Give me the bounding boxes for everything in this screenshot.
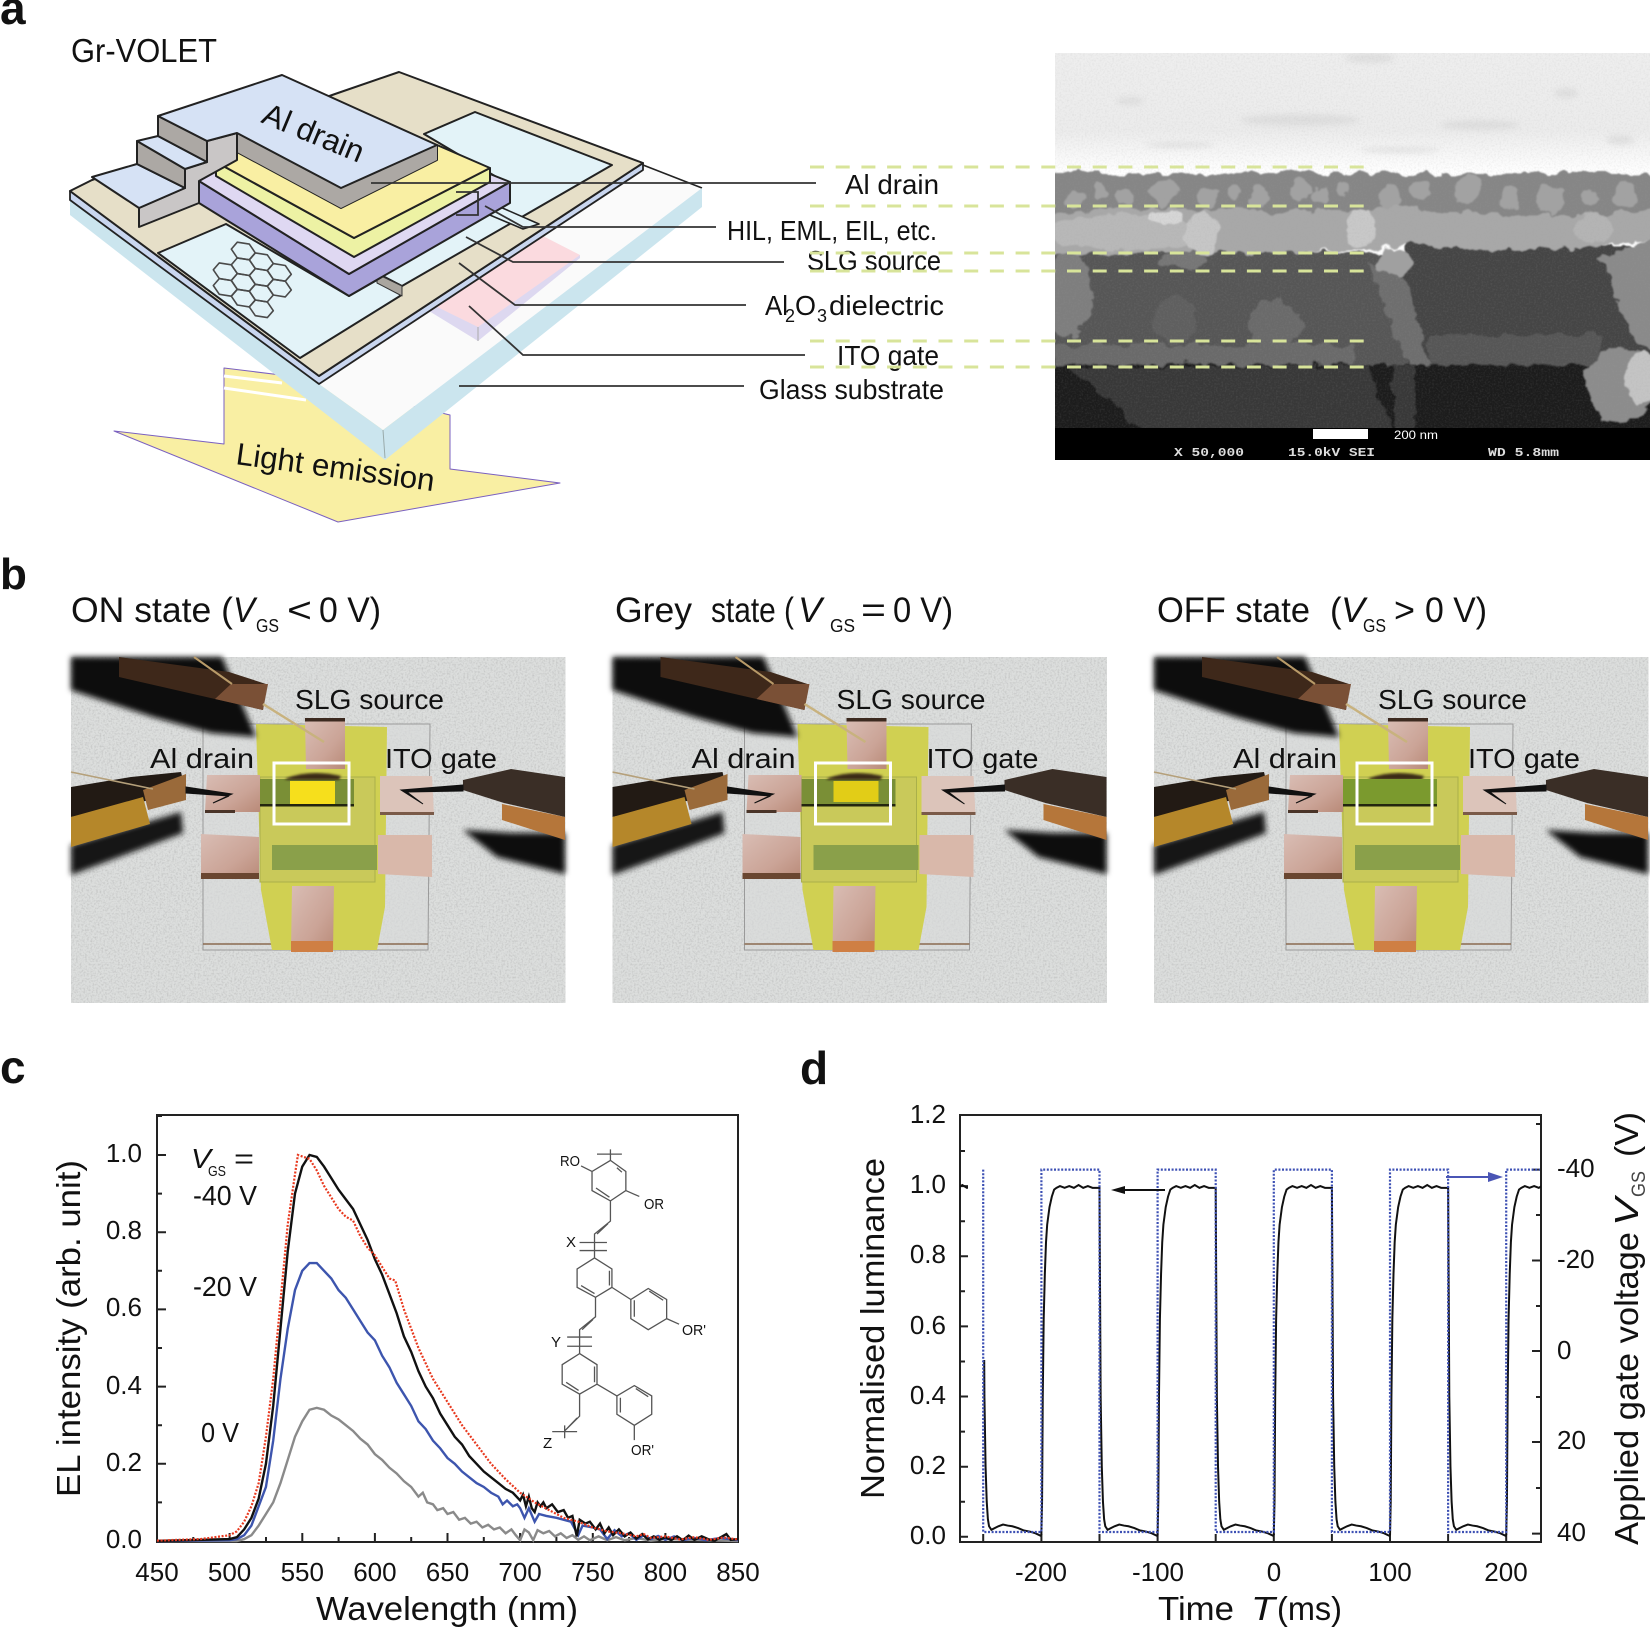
photo: Grey state device: [612, 657, 1107, 1003]
arrow: light emission: Light emission: [234, 436, 437, 498]
heading: ON state: GS: [256, 616, 279, 636]
SEM info bar: [1055, 428, 1650, 460]
x tick labels: 650: [426, 1557, 469, 1587]
photo: OFF state device: ITO gate: [1468, 743, 1580, 774]
voltage labels: [191, 1143, 257, 1448]
left tick labels: 0.8: [910, 1239, 946, 1269]
heading: ON state: V: [233, 591, 258, 630]
heading: OFF state: GS: [1363, 616, 1386, 636]
dashed layer guides: [810, 167, 1364, 367]
SLG source regions: [158, 112, 612, 358]
x tick labels: 0: [1267, 1557, 1281, 1587]
label on drain: Al drain: [257, 96, 370, 169]
masking area left of first fall: [968, 1360, 983, 1530]
OLED stack: [92, 75, 510, 296]
right tick labels: 0: [1557, 1335, 1571, 1365]
chart: EL spectra: [50, 1115, 760, 1627]
x tick labels: -200: [1015, 1557, 1067, 1587]
right tick labels: 20: [1557, 1425, 1586, 1455]
voltage labels: V: [191, 1143, 213, 1174]
layer labels: [727, 169, 944, 405]
heading: ON state: 0 V): [319, 591, 381, 630]
layer labels: O: [795, 290, 816, 321]
x tick labels: 700: [498, 1557, 542, 1587]
x tick labels: -100: [1132, 1557, 1184, 1587]
right axis title: V: [1608, 1194, 1645, 1226]
left axis title: Normalised luminance: [854, 1158, 891, 1499]
photo: ON state device: Al drain: [150, 743, 254, 774]
chart: luminance and gate voltage vs time: [854, 1099, 1650, 1627]
SEM micrograph: [1040, 53, 1650, 460]
heading: Grey state: state (: [711, 591, 794, 630]
heading: ON state: ON state (: [71, 591, 233, 630]
SEM info bar: X 50,000: [1174, 446, 1244, 460]
right tick labels: -40: [1557, 1153, 1595, 1183]
left tick labels: 0.2: [910, 1450, 946, 1480]
right tick labels: -20: [1557, 1244, 1595, 1274]
panel letter d: d: [800, 1042, 828, 1094]
heading: Grey state: GS: [830, 616, 855, 636]
arrow: luminance axis: [1111, 1186, 1165, 1194]
y tick labels: 0.0: [106, 1524, 142, 1554]
layer labels: ITO gate: [837, 340, 939, 371]
chemical structure: Y: [551, 1334, 561, 1351]
heading: OFF state: [1157, 591, 1487, 636]
chemical structure: OR: [644, 1196, 664, 1213]
chemical structure: OR': [682, 1322, 706, 1339]
y tick labels: 0.8: [106, 1215, 142, 1245]
heading: OFF state: OFF state: [1157, 591, 1310, 630]
heading: OFF state: >: [1394, 591, 1415, 630]
layer labels: 2: [785, 306, 795, 326]
x tick labels: [135, 1557, 760, 1587]
y tick labels: 1.0: [106, 1138, 142, 1168]
x tick labels: [1015, 1557, 1528, 1587]
y tick labels: 0.6: [106, 1292, 142, 1322]
spectra curves: [157, 1155, 738, 1541]
layer labels: Glass substrate: [759, 374, 944, 405]
layer labels: Al: [765, 290, 788, 321]
y axis title: EL intensity (arb. unit): [50, 1160, 87, 1497]
x tick labels: 100: [1368, 1557, 1412, 1587]
x tick labels: 450: [135, 1557, 179, 1587]
x axis title: Time: [1158, 1590, 1234, 1627]
left tick labels: 0.0: [910, 1520, 946, 1550]
heading: Grey state: =: [861, 591, 886, 630]
arrow: light emission: [114, 368, 560, 522]
left tick labels: 1.0: [910, 1169, 946, 1199]
x tick labels: 800: [644, 1557, 687, 1587]
x tick labels: 600: [353, 1557, 397, 1587]
y tick labels: [106, 1138, 142, 1554]
chemical structure: RO: [560, 1153, 580, 1170]
gate voltage trace: [983, 1170, 1540, 1532]
layer labels: HIL, EML, EIL, etc.: [727, 215, 937, 246]
heading: Grey state: [615, 591, 953, 636]
heading: ON state: [71, 591, 381, 636]
left tick labels: [910, 1099, 946, 1550]
right axis title: Applied gate voltage: [1608, 1232, 1645, 1545]
masking area before first pulse: [968, 1117, 986, 1360]
photo: OFF state device: Al drain: [1233, 743, 1337, 774]
voltage labels: -40 V: [193, 1180, 257, 1211]
photo: Grey state device: Al drain: [692, 743, 796, 774]
dielectric layer: [70, 163, 643, 384]
voltage labels: 0 V: [201, 1417, 239, 1448]
x axis title: T: [1251, 1590, 1278, 1627]
chemical structure: OR': [631, 1442, 654, 1459]
icon: graphene honeycomb: [213, 242, 291, 318]
chemical structure: X: [566, 1234, 576, 1251]
arrow: voltage axis: [1446, 1172, 1503, 1182]
leader lines: [371, 183, 816, 386]
right axis title: GS: [1629, 1171, 1650, 1197]
photo: ON state device: SLG source: [295, 684, 444, 715]
right tick labels: [1557, 1153, 1595, 1547]
heading: OFF state: 0 V): [1425, 591, 1487, 630]
photo: Grey state device: SLG source: [836, 684, 986, 715]
chemical structure: Z: [543, 1435, 552, 1452]
chemical structure: [543, 1149, 706, 1459]
photo: ON state device: ITO gate: [385, 743, 497, 774]
right axis title: (V): [1608, 1112, 1645, 1157]
y tick labels: 0.4: [106, 1370, 142, 1400]
left tick labels: 0.4: [910, 1380, 946, 1410]
beige layer: [70, 72, 643, 376]
left tick labels: 1.2: [910, 1099, 946, 1129]
right tick labels: 40: [1557, 1517, 1586, 1547]
SEM info bar: WD 5.8mm: [1488, 446, 1559, 460]
photo: Grey state device: ITO gate: [926, 743, 1038, 774]
layer labels: SLG source: [807, 245, 941, 276]
panel letter c: c: [0, 1041, 26, 1093]
voltage labels: -20 V: [193, 1271, 257, 1302]
ITO gate layer: [429, 234, 580, 341]
SEM info bar: 200 nm: [1394, 428, 1438, 442]
panel letter b: b: [0, 550, 27, 599]
x tick labels: 200: [1484, 1557, 1528, 1587]
layer labels: Al drain: [845, 169, 939, 200]
heading: ON state: <: [287, 591, 312, 630]
SEM info bar: 15.0kV SEI: [1288, 446, 1375, 460]
x axis title: Wavelength (nm): [316, 1590, 578, 1627]
layer labels: 3: [817, 306, 827, 326]
heading: OFF state: (: [1330, 591, 1342, 630]
luminance trace: [960, 1184, 1541, 1537]
x tick labels: 850: [716, 1557, 760, 1587]
right axis title: [1608, 1112, 1650, 1545]
photo: OFF state device: SLG source: [1378, 684, 1527, 715]
Al drain electrode: [92, 75, 437, 227]
heading: Grey state: 0 V): [893, 591, 953, 630]
x tick labels: 750: [571, 1557, 614, 1587]
heading: Grey state: Grey: [615, 591, 692, 630]
left tick labels: 0.6: [910, 1310, 946, 1340]
glass substrate: [70, 165, 702, 460]
voltage labels: =: [234, 1143, 254, 1174]
diagram: device schematic: [70, 72, 702, 522]
photo: ON state device: [71, 657, 566, 1003]
heading: Gr-VOLET: Gr-VOLET: [71, 32, 217, 69]
photo: OFF state device: [1154, 657, 1648, 1003]
x axis title: (ms): [1277, 1590, 1342, 1627]
voltage labels: GS: [208, 1163, 226, 1180]
heading: Grey state: V: [798, 591, 826, 630]
x tick labels: 500: [208, 1557, 251, 1587]
layer labels: dielectric: [829, 290, 944, 321]
y tick labels: 0.2: [106, 1447, 142, 1477]
x axis title: [1158, 1590, 1342, 1627]
heading: OFF state: V: [1341, 591, 1369, 630]
x tick labels: 550: [281, 1557, 324, 1587]
